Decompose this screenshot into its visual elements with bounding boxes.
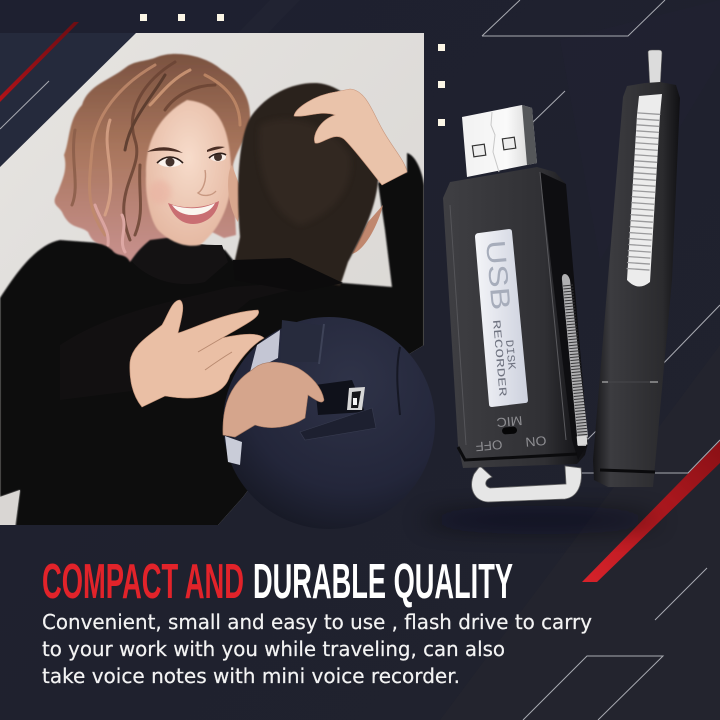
- man's collar line: [233, 258, 343, 285]
- side slider ridges: [562, 274, 588, 446]
- mic label and switch text: MIC: [496, 413, 523, 430]
- diagonal accent: bottom red stripe: [582, 441, 720, 582]
- woman's hand on head: [294, 89, 407, 185]
- back body: [593, 82, 680, 487]
- man's head: [228, 83, 383, 292]
- heading: COMPACT AND: [42, 555, 244, 609]
- recorder body: [443, 167, 588, 468]
- usb plug: [462, 105, 537, 177]
- silver label: USB: [480, 239, 516, 311]
- decorative squares top: [140, 14, 445, 126]
- heading: DURABLE QUALITY: [253, 555, 513, 609]
- mini usb in pocket: [347, 387, 365, 410]
- sweater sleeve shade: [60, 280, 330, 400]
- diagonal accent: top red stripe: [0, 22, 79, 102]
- silver label: [475, 229, 528, 407]
- smile: [168, 201, 219, 224]
- hand in pocket: [223, 362, 324, 437]
- mic label and switch text: OFF: [475, 437, 503, 454]
- lapel: [280, 320, 325, 362]
- description text: to your work with you while traveling, can also: [42, 637, 505, 661]
- sleeve seam: [397, 347, 400, 415]
- woman's hand on back: [130, 300, 264, 407]
- description text: Convenient, small and easy to use , flash drive to carry: [42, 610, 592, 634]
- shirt: [250, 330, 280, 372]
- product: usb recorder, front view: [443, 105, 588, 502]
- top clip tab: [648, 50, 662, 90]
- mic label and switch text: ON: [525, 433, 547, 450]
- pocket: [300, 380, 376, 440]
- small light patch at lower left corner: [0, 490, 20, 525]
- woman's face: [146, 100, 231, 246]
- description text: [42, 610, 592, 688]
- silver label: DISK: [502, 339, 517, 371]
- key ring: [472, 466, 581, 502]
- silver label: RECORDER: [489, 319, 508, 398]
- eyes: [157, 152, 226, 167]
- black clothing: [0, 153, 424, 530]
- product: usb recorder, back view with clip: [593, 50, 680, 487]
- woman's hair: [55, 54, 250, 262]
- silver ridged clip: [627, 94, 662, 287]
- photo: couple embracing: [0, 33, 424, 530]
- description text: take voice notes with mini voice recorder.: [42, 664, 460, 688]
- turtleneck: [151, 237, 224, 251]
- soft shadow beneath the devices: [420, 513, 660, 527]
- mic label and switch text: [475, 413, 547, 454]
- inset circle: pocket close-up: [223, 317, 435, 529]
